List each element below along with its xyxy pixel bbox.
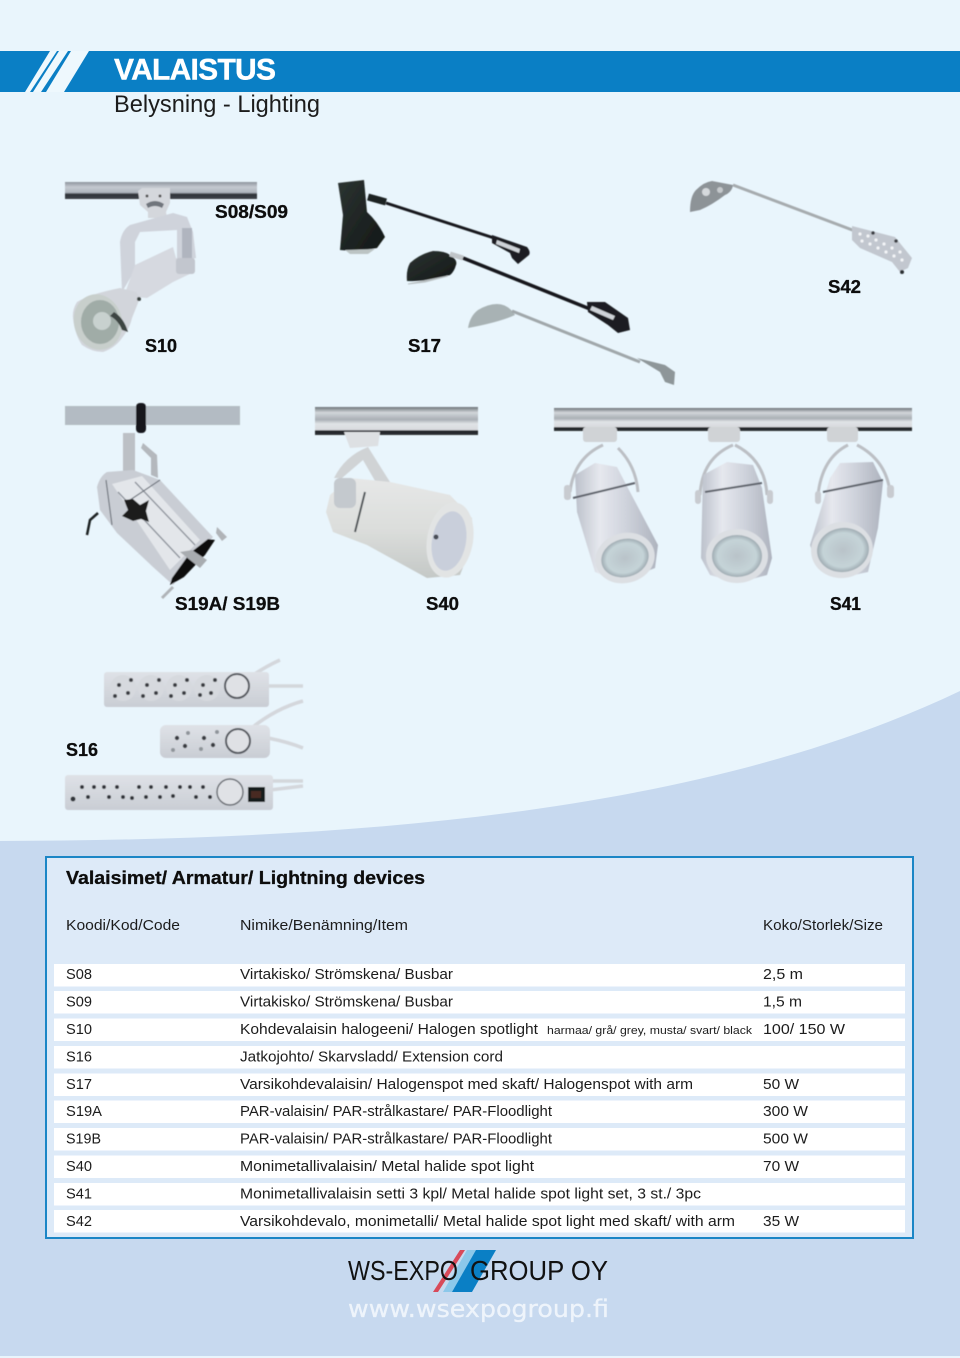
label S16: S16 [66, 740, 98, 760]
product: S40 spotlight [315, 407, 479, 581]
cord 6 sockets [65, 775, 303, 810]
label S41: S41 [830, 594, 861, 614]
row S16: Jatkojohto/ Skarvsladd/ Extension cord [240, 1048, 503, 1066]
header stripes [25, 51, 89, 92]
row S09: S09 [66, 994, 92, 1010]
row S08 [54, 964, 905, 986]
row S08: 2,5 m [763, 966, 803, 983]
row S19A: 300 W [763, 1103, 809, 1120]
row S10: harmaa/ grå/ grey, musta/ svart/ black [547, 1025, 753, 1037]
product: S16 extension cords [65, 660, 303, 810]
row S42 [54, 1210, 905, 1232]
row S19A [54, 1100, 905, 1123]
header banner [0, 51, 960, 92]
label S42: S42 [828, 277, 861, 297]
table title: Valaisimet/ Armatur/ Lightning devices [66, 867, 425, 888]
row S08: S08 [66, 966, 92, 983]
company logo [348, 1250, 608, 1292]
row S19A: S19A [66, 1103, 102, 1120]
label S19A/S19B: S19A/ S19B [175, 594, 280, 614]
row S09: 1,5 m [763, 994, 802, 1010]
column headers: Koko/Storlek/Size [763, 917, 883, 934]
lamp 2 [407, 251, 630, 333]
row S41: S41 [66, 1186, 92, 1202]
lamp 1 [338, 180, 530, 264]
cord 4 sockets [104, 660, 303, 707]
row S42: S42 [66, 1213, 92, 1230]
row S19A: PAR-valaisin/ PAR-strålkastare/ PAR-Floodlight [240, 1103, 553, 1120]
row S10: S10 [66, 1021, 92, 1038]
row S41: Monimetallivalaisin setti 3 kpl/ Metal halide spot light set, 3 st./ 3pc [240, 1186, 702, 1202]
product: S08/S09 busbar and S10 spotlight [65, 182, 257, 355]
row S42: 35 W [763, 1213, 800, 1230]
cord 2 sockets [160, 701, 303, 758]
row S19B: PAR-valaisin/ PAR-strålkastare/ PAR-Floodlight [240, 1130, 553, 1148]
row S41 [54, 1183, 905, 1206]
row S19B [54, 1128, 905, 1150]
product: S19A/S19B PAR floodlight [65, 403, 240, 598]
row S09: Virtakisko/ Strömskena/ Busbar [240, 994, 453, 1010]
logo name: GROUP OY [470, 1255, 608, 1286]
product: S42 arm light [690, 181, 912, 274]
row S19B: 500 W [763, 1130, 809, 1148]
lamp middle [695, 427, 773, 583]
row S40: S40 [66, 1158, 92, 1175]
row S09 [54, 991, 905, 1014]
main heading: VALAISTUS [114, 54, 276, 86]
row S40 [54, 1156, 905, 1178]
row S17: 50 W [763, 1076, 800, 1093]
logo stripes [433, 1250, 496, 1292]
label S40: S40 [426, 594, 459, 614]
lamp left [564, 427, 660, 590]
row S10: 100/ 150 W [763, 1021, 846, 1038]
lamp right [807, 427, 894, 582]
row S17 [54, 1074, 905, 1096]
label S17: S17 [408, 336, 441, 356]
panel: lighting devices table [46, 857, 913, 1238]
label S08/S09: S08/S09 [215, 202, 288, 222]
column headers: Nimike/Benämning/Item [240, 917, 408, 934]
subheading: Belysning - Lighting [114, 91, 320, 118]
row S10: Kohdevalaisin halogeeni/ Halogen spotlight [240, 1021, 539, 1038]
website address: www.wsexpogroup.fi [348, 1295, 609, 1323]
product: S17 arm spotlights [338, 180, 675, 385]
row S16 [54, 1046, 905, 1068]
column headers [66, 917, 883, 934]
row S17: Varsikohdevalaisin/ Halogenspot med skaft/ Halogenspot with arm [240, 1076, 693, 1093]
row S42: Varsikohdevalo, monimetalli/ Metal halide spot light med skaft/ with arm [240, 1213, 735, 1230]
row S17: S17 [66, 1076, 92, 1093]
row S16: S16 [66, 1048, 92, 1066]
row S08: Virtakisko/ Strömskena/ Busbar [240, 966, 453, 983]
row S19B: S19B [66, 1130, 101, 1148]
product: S41 metal halide spot set [554, 408, 912, 590]
row S10 [54, 1018, 905, 1041]
row S40: 70 W [763, 1158, 800, 1175]
logo name: WS-EXPO [348, 1255, 458, 1286]
lamp 3 [468, 304, 675, 385]
row S40: Monimetallivalaisin/ Metal halide spot light [240, 1158, 535, 1175]
background curve [0, 691, 960, 1356]
label S10: S10 [145, 336, 177, 356]
column headers: Koodi/Kod/Code [66, 917, 180, 934]
